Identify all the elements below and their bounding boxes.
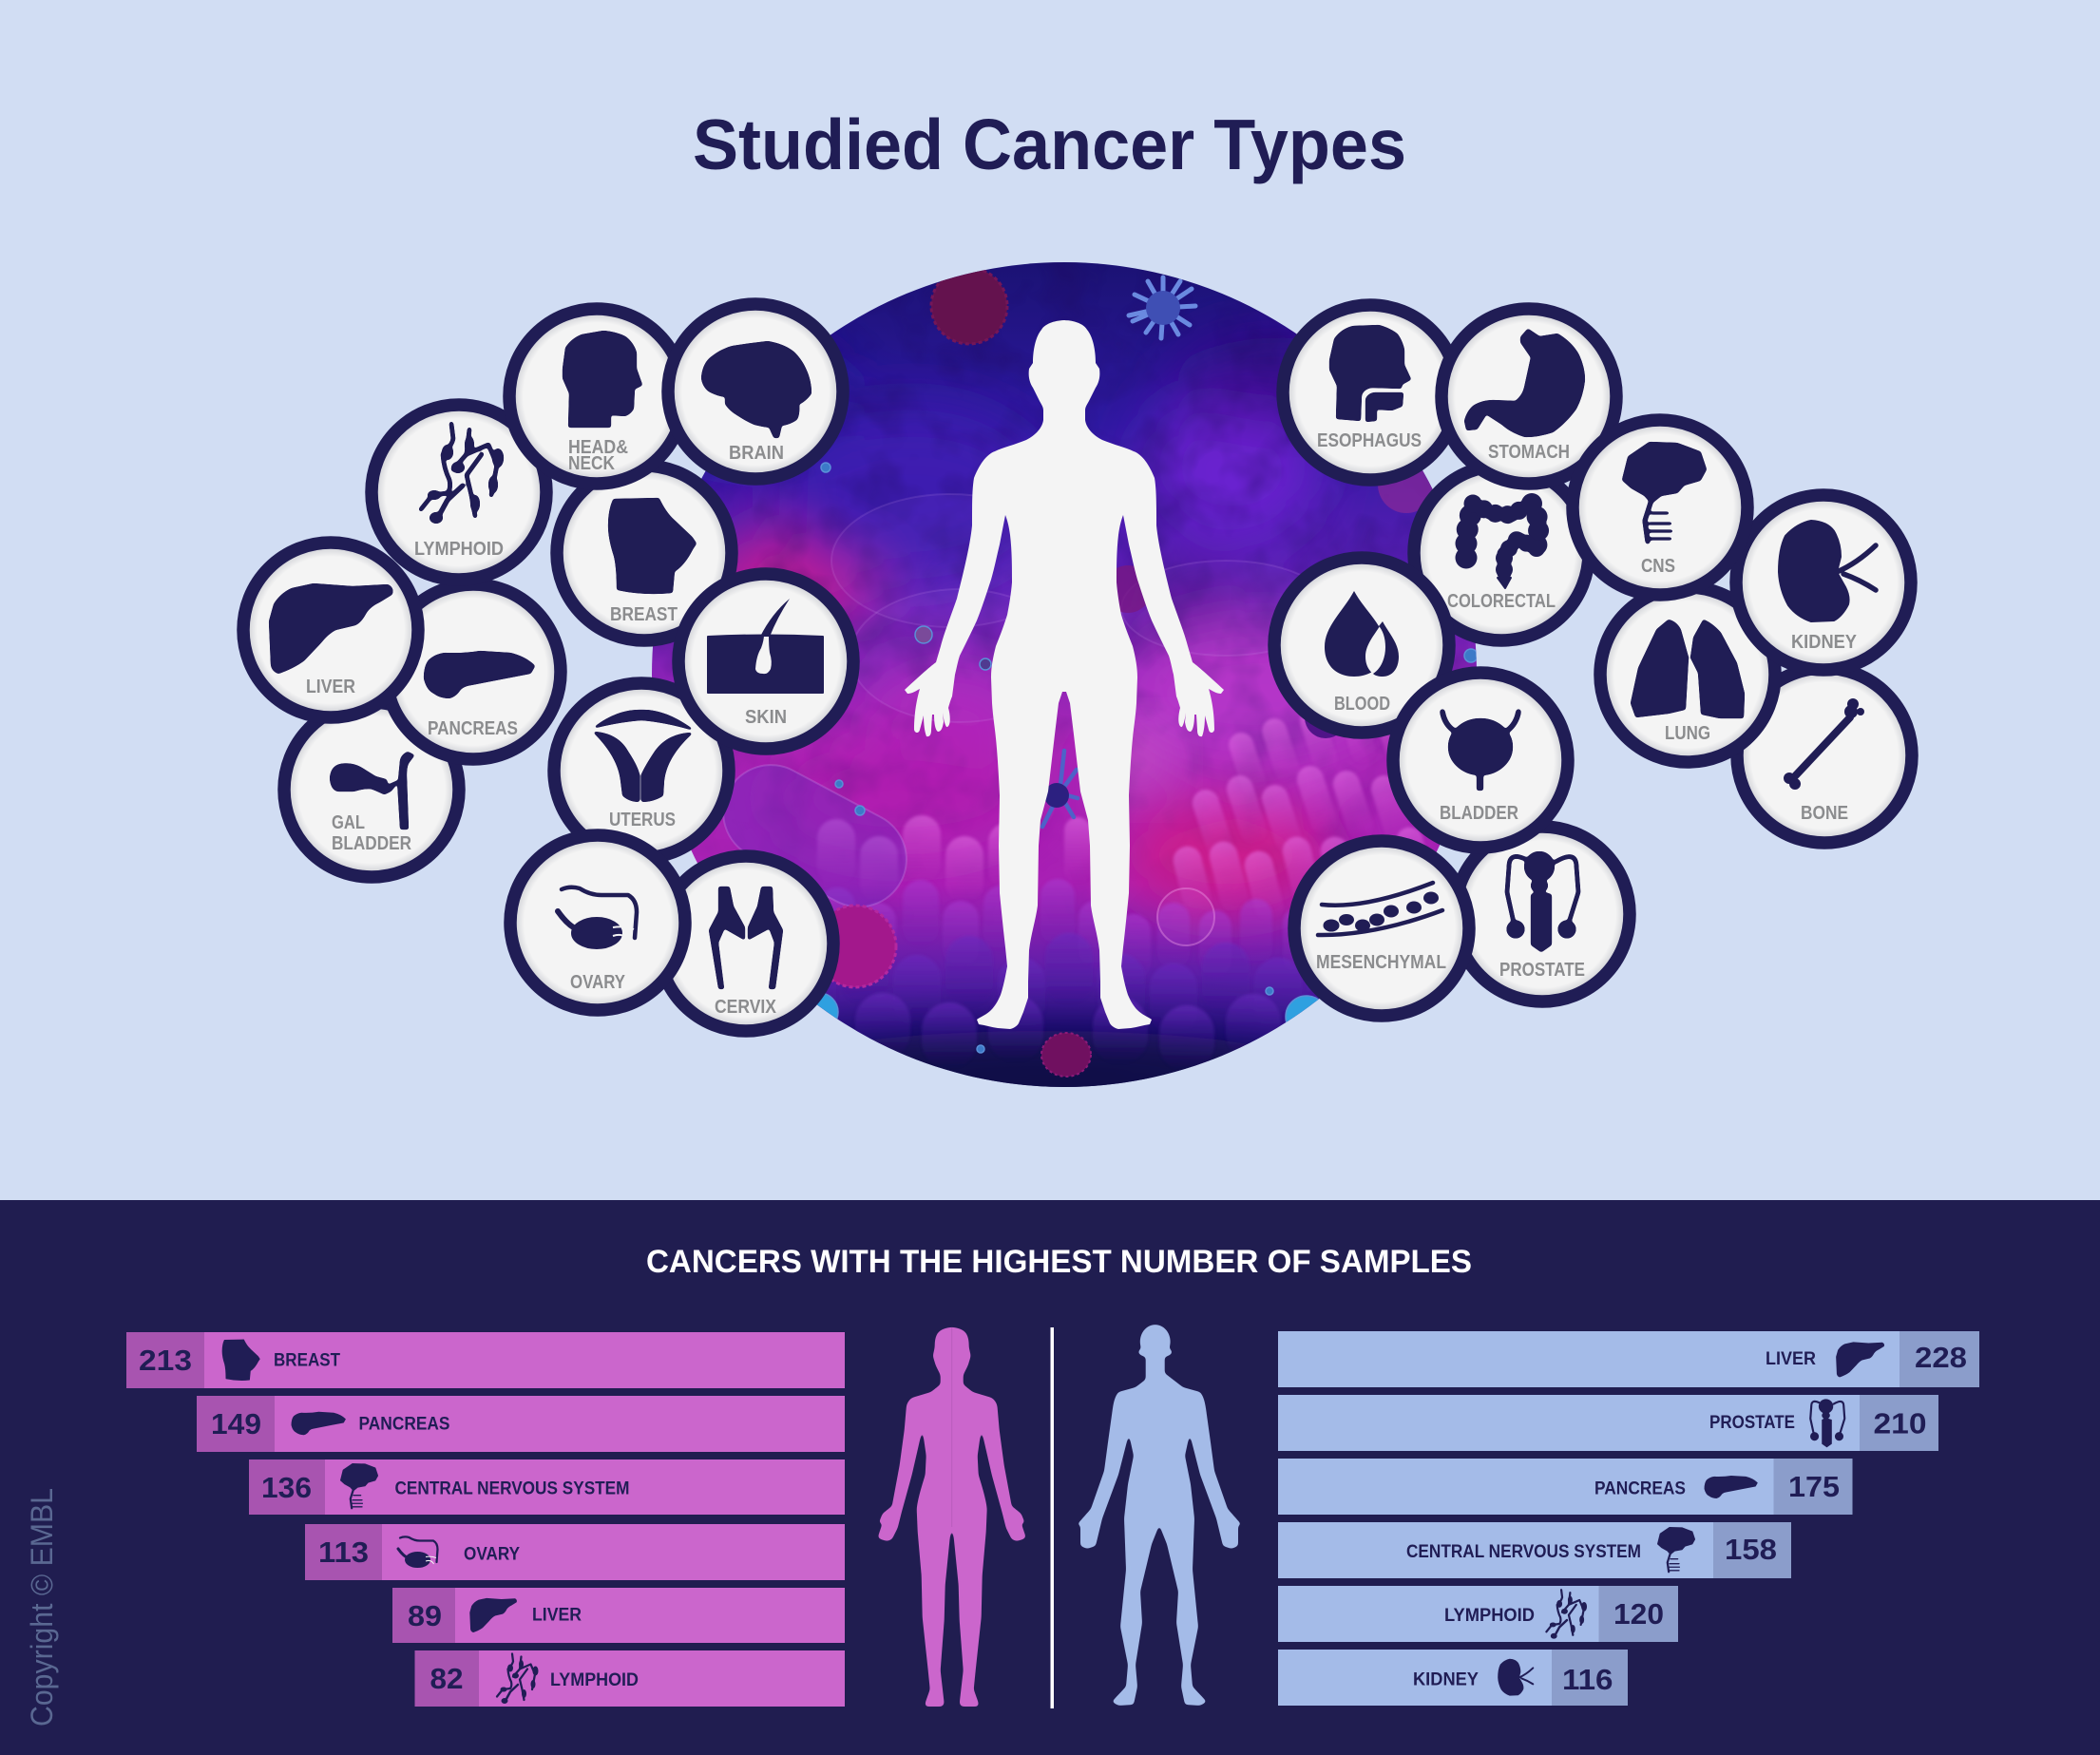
villi: right fan (817, 716, 1425, 903)
badge: gall bladder (284, 702, 459, 877)
organ labels: LUNG (1665, 723, 1710, 744)
badge: lung (1600, 587, 1775, 762)
organ labels: BLADDER (332, 833, 411, 854)
bar: liver 89: LIVER (532, 1606, 582, 1625)
badge: pancreas (386, 584, 561, 759)
bar: lymphoid 120 (1278, 1586, 1678, 1642)
bar: central nervous system 158 (1278, 1522, 1791, 1578)
bar: kidney 116: 116 (1562, 1663, 1613, 1696)
bar: pancreas 149: 149 (211, 1407, 261, 1440)
badge: blood (1274, 558, 1449, 733)
villi: middle row (826, 879, 1289, 958)
panel: right organ badges (1274, 305, 1912, 1016)
bar: lymphoid 82: 82 (430, 1662, 464, 1695)
male figure (1077, 1325, 1242, 1706)
cell: dark red spore (931, 268, 1007, 344)
cell: right mid spore (1305, 720, 1336, 738)
organ labels: KIDNEY (1791, 632, 1858, 653)
organ labels: GAL (332, 812, 365, 833)
badge: cervix (659, 856, 833, 1031)
badge: skin (678, 574, 853, 749)
badge: bone (1737, 668, 1912, 843)
bar: ovary 113: OVARY (464, 1545, 520, 1564)
cell: right upper spore (1378, 470, 1433, 513)
title: Studied Cancer Types (693, 105, 1406, 184)
organ labels: HEAD& (568, 437, 628, 458)
bar: lymphoid 120: LYMPHOID (1444, 1606, 1535, 1626)
panel: left organ badges (243, 304, 853, 1031)
organ labels: BLOOD (1334, 694, 1390, 715)
bar: breast 213 (126, 1332, 845, 1388)
bar: central nervous system 136: CENTRAL NERVOUS SYSTEM (395, 1478, 629, 1499)
cell: bottom spore (1041, 1033, 1091, 1077)
bar: pancreas 175: PANCREAS (1594, 1478, 1686, 1499)
bar: prostate 210: PROSTATE (1709, 1413, 1795, 1433)
copyright: Copyright © EMBL (25, 1488, 59, 1726)
badge: uterus (554, 683, 729, 858)
cell: behind body (1117, 565, 1146, 613)
organ labels: PROSTATE (1499, 960, 1585, 981)
bar: liver 89: 89 (408, 1599, 442, 1632)
organ labels: CNS (1641, 556, 1675, 577)
bar: pancreas 149 (197, 1396, 845, 1452)
virus: blue spiked (1129, 277, 1195, 338)
badge: brain (668, 304, 843, 479)
capsule: translucent left (722, 764, 907, 906)
badge: mesenchymal (1294, 841, 1469, 1016)
organ labels: LYMPHOID (414, 539, 504, 560)
organ labels: UTERUS (609, 810, 676, 830)
bar chart: female (126, 1332, 845, 1707)
organ labels: SKIN (745, 707, 787, 728)
badge: breast (557, 466, 732, 640)
virus: behind figure (1042, 751, 1078, 827)
illustration: microscopic cancer cells background (637, 257, 1482, 1116)
bar: pancreas 175: 175 (1788, 1470, 1840, 1503)
organ labels: BONE (1801, 803, 1848, 824)
organ labels (306, 430, 1858, 1018)
bar: breast 213: BREAST (274, 1351, 340, 1370)
bar: central nervous system 158: 158 (1725, 1533, 1777, 1566)
bar chart: male (1278, 1331, 1979, 1706)
organ labels: STOMACH (1488, 442, 1570, 463)
human silhouette (905, 320, 1224, 1029)
glow (1112, 732, 1169, 789)
bar: central nervous system 158: CENTRAL NERVOUS SYSTEM (1406, 1542, 1641, 1562)
bar: liver 89 (392, 1588, 845, 1643)
bar: prostate 210: 210 (1874, 1406, 1927, 1440)
bar: pancreas 149: PANCREAS (359, 1414, 450, 1435)
female figure (878, 1327, 1026, 1707)
bar: ovary 113 (305, 1524, 845, 1580)
organ labels: OVARY (570, 972, 626, 993)
bar: kidney 116 (1278, 1650, 1628, 1706)
bar: liver 228: LIVER (1766, 1349, 1816, 1369)
badge: ovary (510, 835, 685, 1010)
organ labels: CERVIX (715, 997, 777, 1018)
bar: pancreas 175 (1278, 1459, 1853, 1515)
badge: colorectal (1414, 466, 1589, 640)
bar: central nervous system 136 (249, 1459, 845, 1515)
blue particles (800, 463, 1478, 1053)
badge: lymphoid (372, 405, 546, 580)
badge: head and neck (509, 309, 684, 484)
badge: CNS (1573, 420, 1747, 595)
organ labels: NECK (568, 453, 615, 474)
organ labels: LIVER (306, 677, 355, 697)
bar: lymphoid 120: 120 (1613, 1597, 1664, 1631)
badge: liver (243, 543, 418, 717)
badge: esophagus (1283, 305, 1458, 480)
bar: liver 228 (1278, 1331, 1979, 1387)
organ labels: BLADDER (1440, 803, 1518, 824)
badge: prostate (1455, 827, 1630, 1001)
capsules: translucent mid (831, 494, 1330, 722)
bar: breast 213: 213 (139, 1344, 192, 1377)
divider (1051, 1327, 1054, 1708)
villi: foreground bubbles (855, 934, 1298, 1059)
badge: bladder (1393, 673, 1568, 848)
badge: stomach (1441, 309, 1616, 484)
lens bubble (1157, 888, 1214, 945)
organ labels: MESENCHYMAL (1316, 952, 1446, 973)
organ labels: COLORECTAL (1447, 591, 1556, 612)
bar: prostate 210 (1278, 1395, 1938, 1451)
bottom panel (0, 1200, 2100, 1755)
bar: central nervous system 136: 136 (261, 1471, 312, 1504)
bar: ovary 113: 113 (318, 1536, 369, 1569)
organ labels: BRAIN (729, 443, 784, 464)
badge: kidney (1736, 495, 1911, 670)
bar: kidney 116: KIDNEY (1413, 1670, 1479, 1689)
organ labels: PANCREAS (428, 718, 518, 739)
chart heading: CANCERS WITH THE HIGHEST NUMBER OF SAMPLES (646, 1244, 1472, 1280)
background (0, 0, 2100, 1200)
cell: magenta spore (831, 905, 897, 988)
organ labels: ESOPHAGUS (1317, 430, 1422, 451)
bar: lymphoid 82: LYMPHOID (550, 1670, 639, 1690)
bar: lymphoid 82 (414, 1650, 845, 1707)
bar: liver 228: 228 (1915, 1341, 1967, 1374)
organ labels: BREAST (610, 604, 678, 625)
